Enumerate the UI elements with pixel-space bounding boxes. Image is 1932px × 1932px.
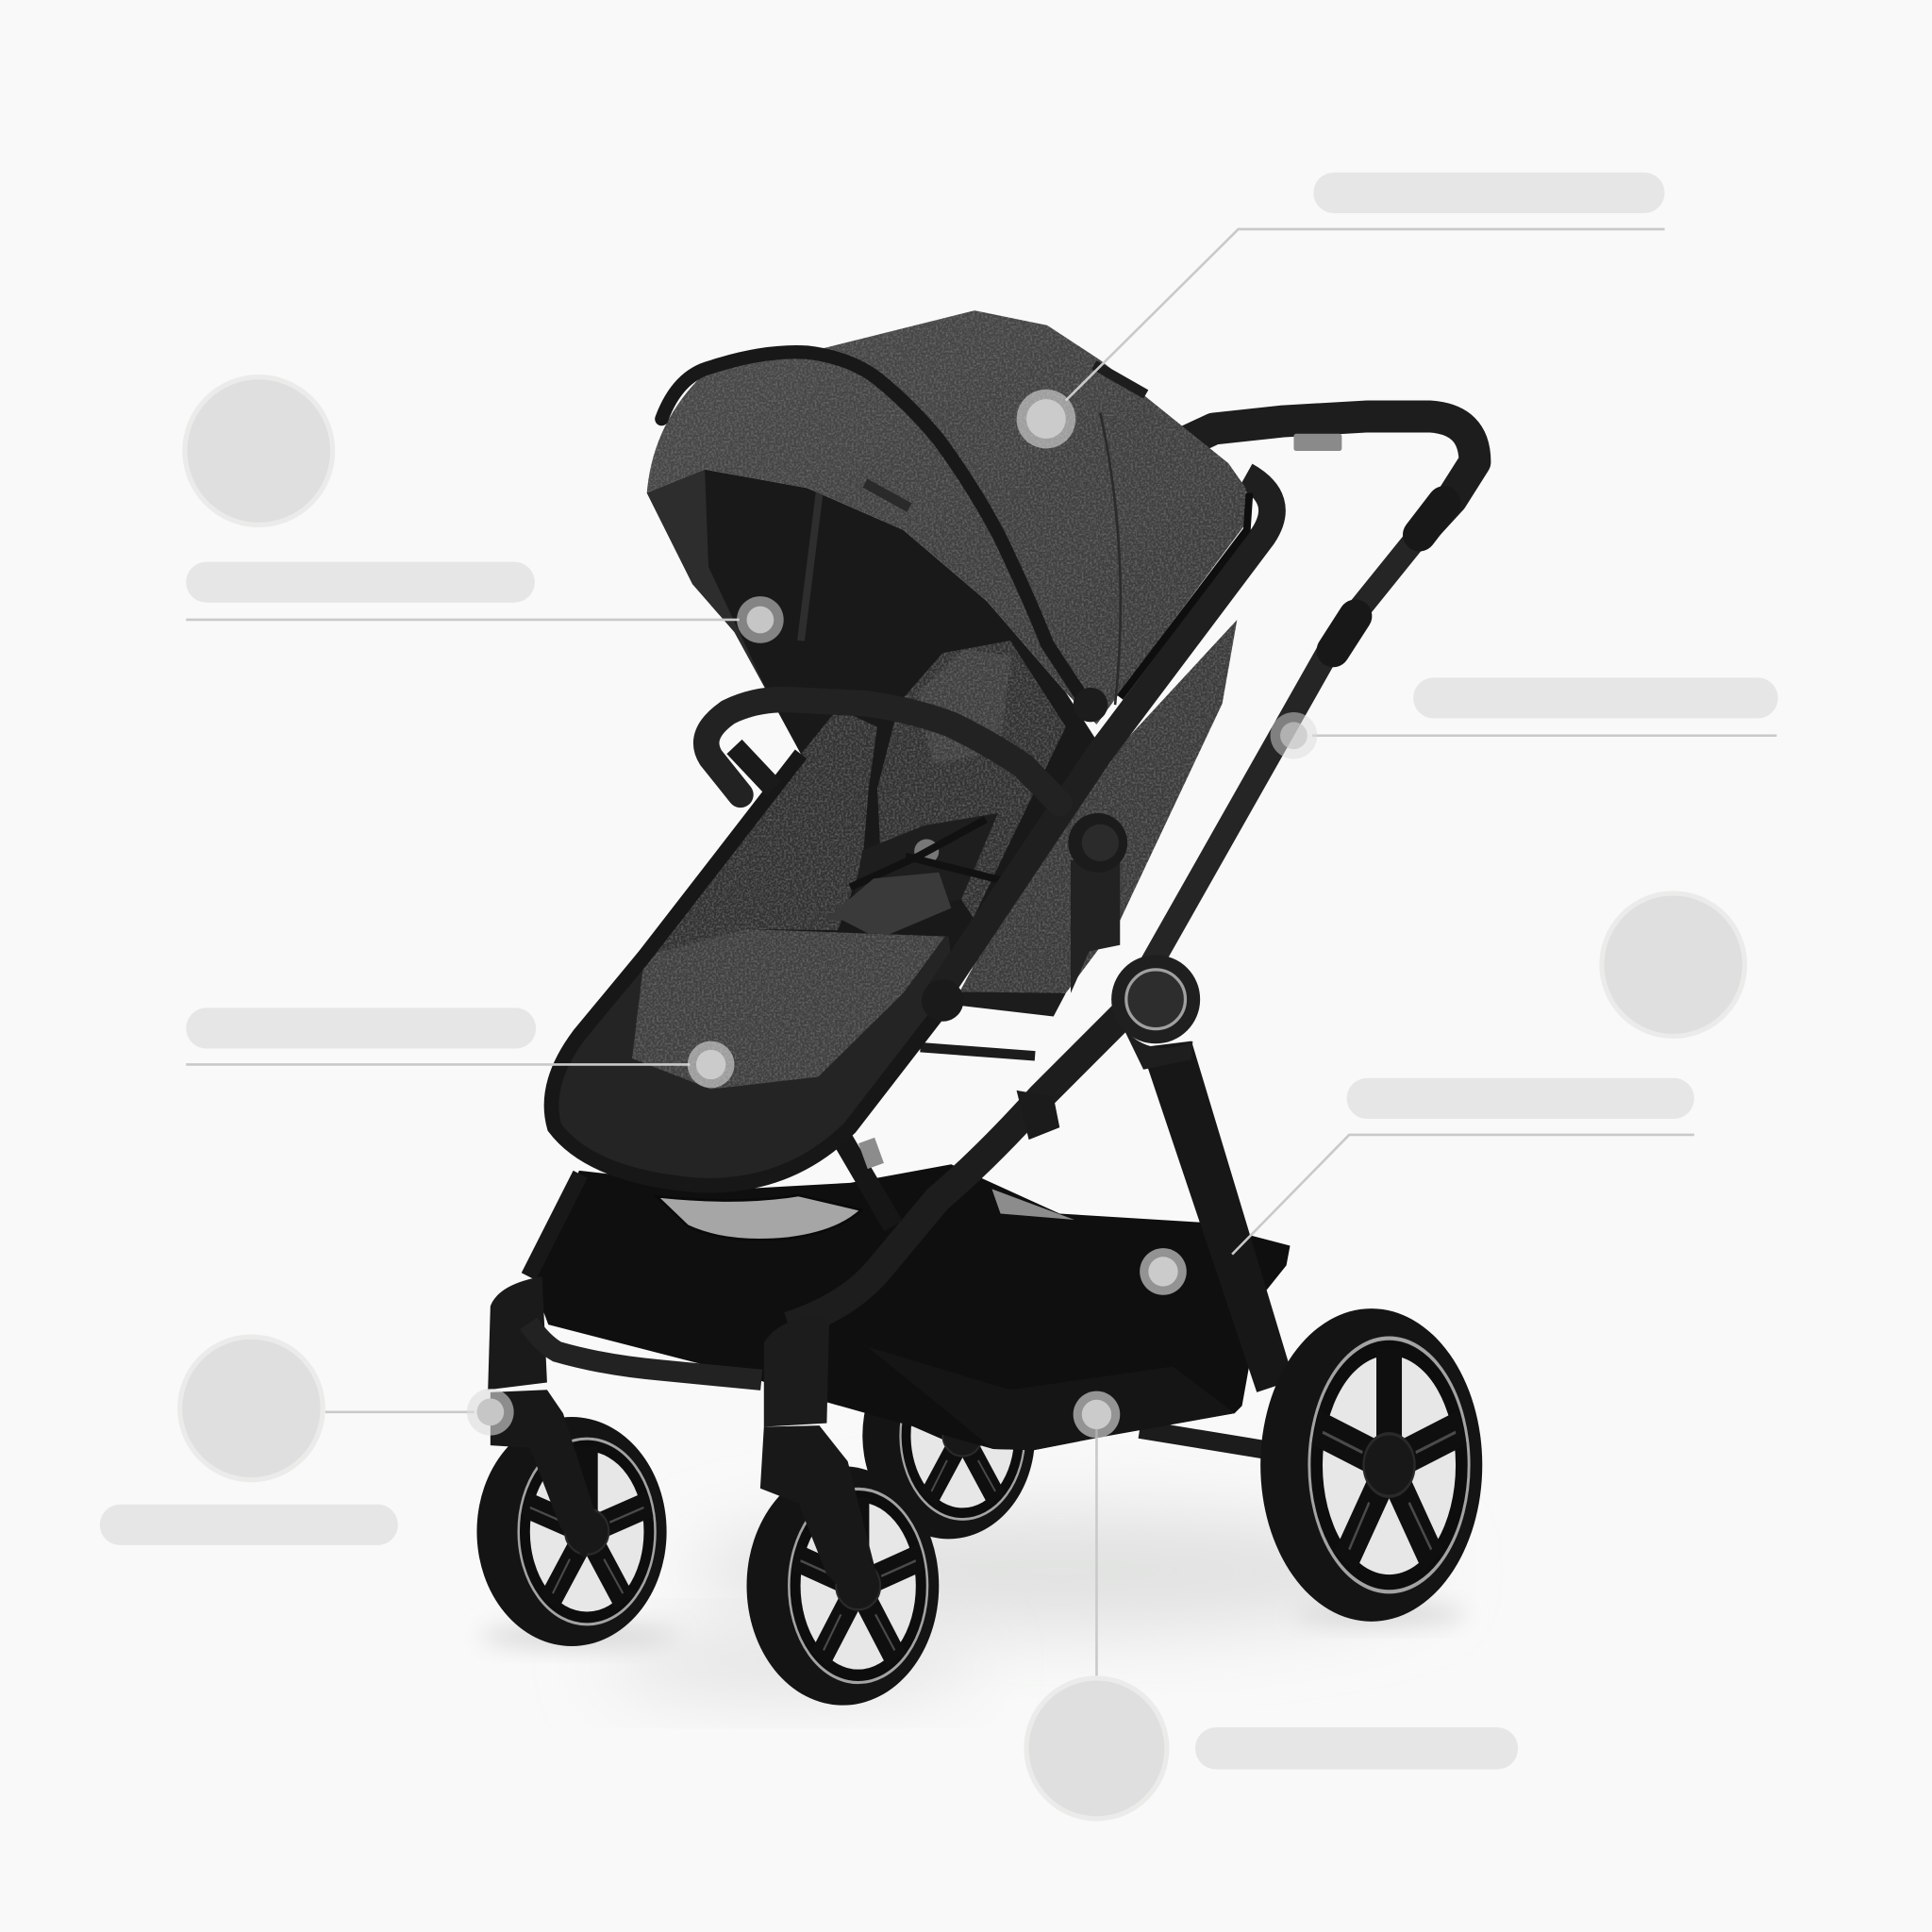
- tube collars: [1333, 503, 1444, 651]
- seat mount: [1071, 860, 1120, 993]
- harness buckle: [914, 839, 939, 864]
- under-seat tray: [949, 991, 1066, 1017]
- canopy lining: [647, 470, 770, 697]
- seat fabric back: [877, 641, 1066, 918]
- front right column: [764, 1313, 829, 1426]
- lower curved tube: [789, 1010, 1127, 1325]
- callout: canopy interior: [185, 377, 784, 643]
- bumper bar: [707, 700, 1059, 804]
- belt area: [850, 813, 998, 918]
- floor shadow: [480, 1509, 1466, 1693]
- front left column: [488, 1276, 547, 1390]
- front right fork: [760, 1425, 878, 1607]
- rear wheel: [1260, 1308, 1482, 1622]
- seat footrest base: [551, 929, 955, 1186]
- left basket tube: [528, 1174, 580, 1276]
- rear leg: [1141, 1041, 1293, 1392]
- seat support strut: [842, 1138, 893, 1226]
- rear far wheel: [862, 1332, 1035, 1539]
- seat interior: [641, 470, 1108, 986]
- rear axle: [1140, 1429, 1275, 1452]
- canopy: [647, 310, 1249, 724]
- storage basket: [532, 1164, 1291, 1450]
- front axle bar: [528, 1324, 761, 1380]
- basket mesh rear: [991, 1189, 1074, 1220]
- seat fabric left: [641, 708, 877, 961]
- handle latch: [1293, 434, 1341, 451]
- canopy zip: [1120, 492, 1249, 697]
- callout: seat: [186, 1008, 734, 1088]
- basket mesh front: [657, 1195, 861, 1240]
- callout: basket: [1140, 893, 1744, 1295]
- front left fork: [491, 1390, 601, 1558]
- seat tub rim: [551, 754, 955, 1186]
- callout: lower basket: [1026, 1391, 1518, 1819]
- canopy tab: [1094, 365, 1146, 394]
- visor label tab: [865, 483, 909, 508]
- seat pad: [632, 929, 945, 1090]
- seat side panel: [955, 620, 1237, 1001]
- callout: front suspension: [100, 1337, 514, 1545]
- callout: canopy: [1017, 173, 1665, 448]
- harness crotch pad: [824, 873, 951, 939]
- frame hub: [1111, 955, 1200, 1070]
- head pad: [918, 649, 1011, 764]
- seat recline hub: [922, 688, 1127, 1022]
- seat frame tube: [939, 475, 1272, 993]
- cross bar under seat: [921, 1047, 1035, 1056]
- front left wheel: [476, 1276, 667, 1646]
- front right wheel: [747, 1313, 939, 1706]
- canopy rim: [661, 352, 1083, 699]
- callout: handle tube: [1271, 677, 1778, 759]
- handle and main tube: [1146, 416, 1474, 974]
